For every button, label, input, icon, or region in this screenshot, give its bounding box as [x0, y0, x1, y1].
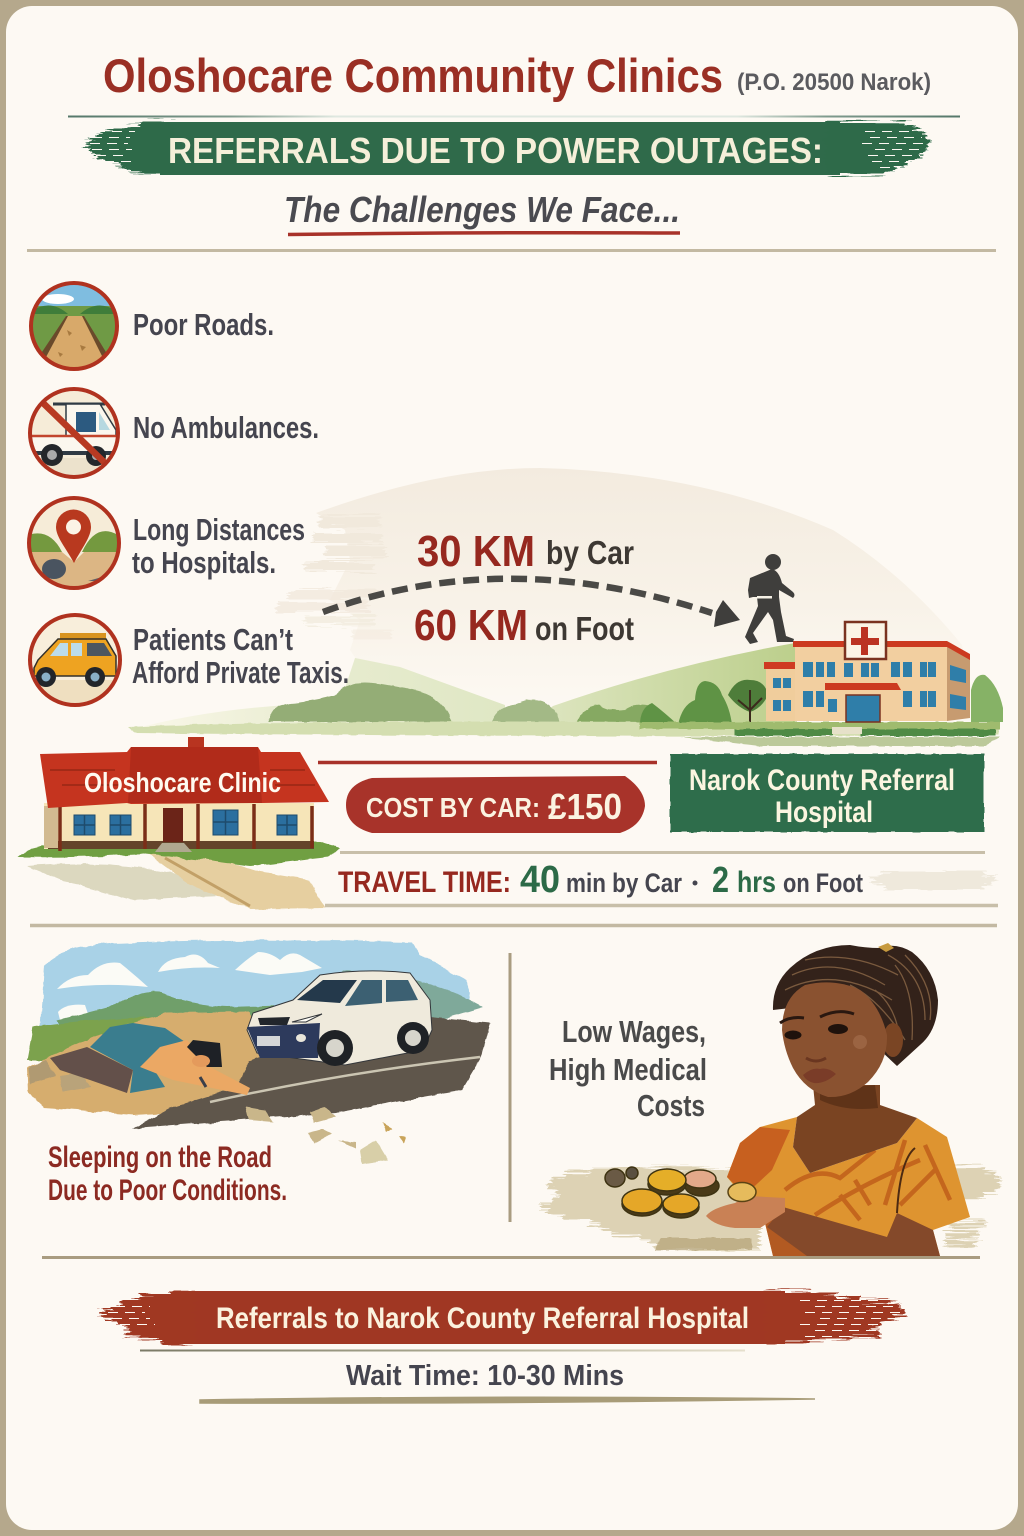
icon: taxi [30, 615, 122, 705]
caption: sleeping on the road: Sleeping on the Road [48, 1141, 272, 1174]
caption: low wages: Costs [637, 1088, 705, 1123]
banner: referrals to hospital: Referrals to Narok County Referral Hospital [216, 1302, 749, 1335]
hair [773, 945, 938, 1066]
clouds [57, 952, 322, 1020]
sleeve seam [897, 1148, 915, 1213]
ground band [128, 722, 1000, 736]
banner: referrals due to power outages: REFERRALS DUE TO POWER OUTAGES: [168, 130, 823, 171]
caption: low wages [549, 1014, 707, 1123]
coins [605, 1167, 719, 1218]
banner: referrals due to power outages [86, 122, 928, 175]
caption: low wages: Low Wages, [562, 1014, 706, 1049]
car [247, 971, 432, 1066]
banner: referrals to hospital [100, 1291, 905, 1344]
travel time [338, 859, 863, 901]
travel time: hrs [737, 866, 776, 899]
distance text: 30 KM [417, 527, 535, 576]
label: to Hospitals. [132, 545, 276, 580]
travel time: 2 [712, 859, 729, 900]
clinic name: Oloshocare Clinic [84, 767, 281, 798]
hospital building [764, 622, 970, 734]
sand [540, 1170, 1000, 1246]
icon: map pin [28, 497, 120, 590]
ear [883, 1023, 903, 1057]
hills [300, 970, 483, 1020]
arm [767, 1207, 940, 1256]
bushes left [270, 682, 452, 722]
neck and chest [793, 1085, 917, 1173]
distance text [414, 527, 634, 650]
face [782, 982, 887, 1097]
route arrow [323, 579, 740, 627]
caption: low wages: High Medical [549, 1052, 707, 1087]
travel time: 40 [520, 859, 560, 901]
grass [27, 1017, 200, 1060]
subtitle: The Challenges We Face... [284, 189, 680, 230]
label [132, 512, 305, 580]
travel time: on Foot [783, 868, 863, 898]
challenge: unaffordable taxis [30, 615, 349, 705]
walls [44, 803, 314, 849]
title: (P.O. 20500 Narok) [737, 69, 931, 96]
yard [27, 864, 230, 900]
label: Long Distances [133, 512, 305, 547]
challenge: poor roads [30, 282, 274, 376]
wait time: Wait Time: 10-30 Mins [346, 1360, 624, 1392]
challenge: long distances [28, 497, 305, 590]
cost badge: COST BY CAR: [366, 792, 540, 823]
hospital name banner: Hospital [775, 796, 873, 829]
left pale hill [130, 658, 505, 730]
label: Poor Roads. [133, 307, 274, 342]
landscape: route to hospital [128, 468, 1003, 746]
distance text: on Foot [535, 610, 634, 647]
roof [188, 737, 204, 748]
icon: crossed ambulance [30, 388, 120, 478]
asphalt [133, 1017, 490, 1128]
distance text: 60 KM [414, 601, 528, 650]
facial features [780, 1012, 867, 1083]
brush streaks [278, 516, 392, 639]
clinic building [17, 737, 340, 909]
label [132, 622, 349, 690]
dirt [27, 1012, 300, 1115]
label: Afford Private Taxis. [132, 655, 349, 690]
label: Patients Can’t [133, 622, 293, 657]
cost badge [346, 776, 645, 833]
hospital name banner: Narok County Referral [689, 764, 955, 797]
caption: sleeping on the road: Due to Poor Conditions. [48, 1174, 287, 1207]
caption: sleeping on the road [48, 1141, 287, 1207]
right hill [520, 643, 795, 730]
challenge: no ambulances [30, 388, 319, 478]
walking person [745, 554, 794, 644]
icon: road [30, 282, 120, 376]
distance text: by Car [546, 534, 634, 571]
label: No Ambulances. [133, 410, 319, 445]
cost badge: £150 [548, 786, 622, 827]
stones [28, 1060, 406, 1164]
illustration: sleeping on the road [27, 940, 490, 1164]
travel time: TRAVEL TIME: [338, 866, 511, 899]
hospital name banner [670, 754, 984, 832]
title: Oloshocare Community Clinics [103, 49, 723, 102]
shirt [727, 1117, 970, 1256]
sky [40, 940, 470, 1035]
hill dome [300, 468, 975, 712]
coin in hand [728, 1182, 756, 1202]
hand [706, 1196, 785, 1228]
trees [640, 675, 1003, 726]
illustration: woman with coins [540, 943, 1000, 1256]
sleeping person [50, 1023, 250, 1095]
travel time: min by Car [566, 868, 682, 898]
